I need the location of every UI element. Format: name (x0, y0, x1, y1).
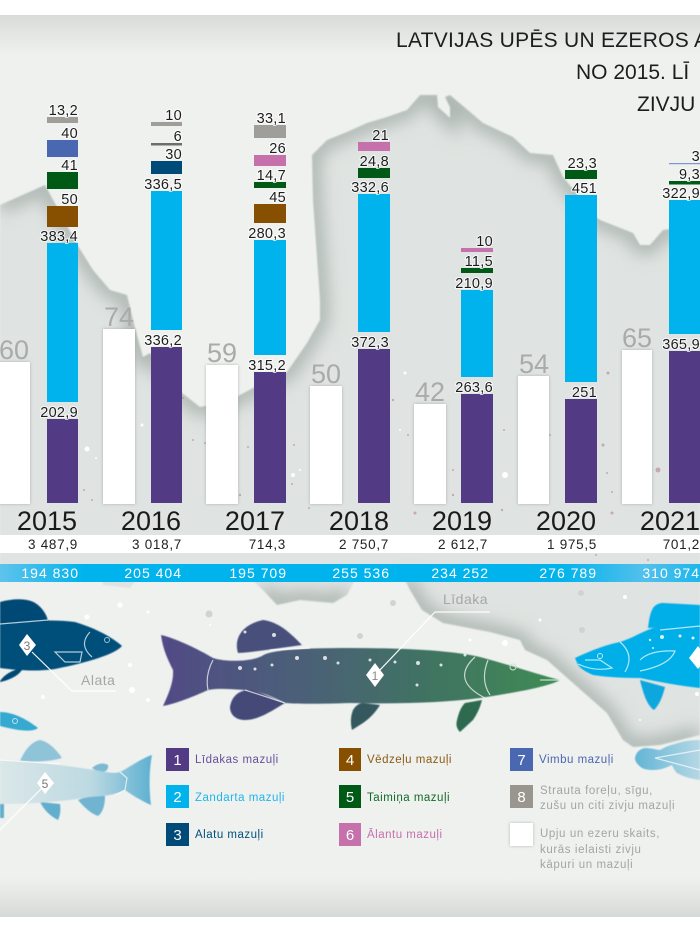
legend item 4: Vēdzeļu mazuļi (367, 754, 452, 766)
legend item 2: 2 (173, 789, 182, 806)
year labels: 2018 (329, 506, 389, 536)
legend item 5 (339, 785, 450, 808)
legend item 3 (166, 823, 264, 846)
chart: 2017: 33,1 (257, 111, 286, 127)
legend item 4: 4 (346, 752, 354, 769)
title: LATVIJAS UPĒS UN EZEROS A (396, 29, 700, 52)
chart: 2019: 11,5 (465, 254, 493, 270)
blue totals band (0, 564, 700, 582)
legend item white: Upju un ezeru skaits, (540, 828, 660, 840)
chart: 2015: 40 (61, 126, 78, 142)
legend item 6: 6 (346, 827, 354, 844)
year labels: 2017 (225, 506, 285, 536)
fish: alata: Alata (81, 672, 115, 688)
chart: 2017: 14,7 (257, 168, 286, 184)
fish: foreļu: 5 (42, 777, 49, 791)
fish: small cyan fish (0, 712, 38, 731)
legend item 1: 1 (173, 752, 182, 769)
chart: 2017: 59 (207, 338, 237, 368)
white totals band: 701,2 (663, 537, 700, 552)
chart: 2019: 263,6 (455, 380, 493, 396)
legend item 5: 5 (346, 789, 354, 806)
legend item 8: 8 (517, 789, 526, 806)
chart: 2017: 280,3 (248, 226, 286, 242)
legend item 6 (339, 823, 443, 846)
chart: 2016: 30 (165, 147, 182, 163)
fish: līdaka: Līdaka (443, 591, 488, 607)
year labels: 2020 (536, 506, 596, 536)
legend item 3: 3 (173, 827, 182, 844)
legend item 1: Līdakas mazuļi (195, 754, 279, 766)
year labels: 2019 (432, 506, 492, 536)
legend item 2: Zandarta mazuļi (195, 792, 285, 804)
map silhouette of Latvia (0, 90, 700, 760)
white totals band: 714,3 (249, 537, 286, 552)
blue totals band: 255 536 (332, 565, 390, 581)
fish: alata (0, 599, 122, 691)
chart: 2021 (622, 149, 700, 504)
chart: 2021: 3 (692, 149, 700, 165)
legend item 7: Vimbu mazuļi (539, 754, 614, 766)
white totals band: 2 750,7 (339, 537, 389, 552)
legend item white: kurās ielaisti zivju (540, 844, 641, 856)
chart: 2018 (310, 128, 390, 504)
chart: 2015 (0, 103, 78, 504)
chart: 2016: 6 (174, 129, 182, 145)
legend item 6: Ālantu mazuļi (367, 829, 443, 841)
legend item 4 (339, 748, 452, 771)
blue totals band: 310 974 (642, 565, 700, 581)
specks (41, 372, 699, 721)
chart: 2020: 251 (572, 385, 597, 401)
blue totals band: 276 789 (539, 565, 597, 581)
chart: 2015: 13,2 (49, 103, 78, 119)
fish: alata: 3 (24, 639, 31, 653)
chart: 2018: 21 (372, 128, 389, 144)
white totals band (0, 535, 700, 553)
year labels: 2021 (640, 506, 700, 536)
chart: 2016: 336,2 (144, 333, 182, 349)
legend item 5: Taimiņa mazuļi (367, 792, 450, 804)
chart: 2017: 45 (269, 190, 286, 206)
chart: 2015: 50 (61, 192, 78, 208)
chart: 2021: 65 (622, 323, 652, 353)
fish: zandarts (575, 603, 700, 710)
chart: 2015: 202,9 (40, 405, 78, 421)
title: NO 2015. LĪ (576, 61, 689, 84)
chart: 2018: 372,3 (351, 335, 389, 351)
white totals band: 3 018,7 (132, 537, 182, 552)
year labels: 2016 (121, 506, 181, 536)
chart: 2021: 322,9 (662, 186, 700, 202)
white totals band: 2 612,7 (438, 537, 488, 552)
white totals band: 3 487,9 (28, 537, 78, 552)
chart: 2016: 74 (104, 302, 134, 332)
blue totals band: 205 404 (124, 565, 182, 581)
fish: līdaka: 1 (372, 669, 379, 683)
year labels: 2015 (17, 506, 77, 536)
chart: 2018: 50 (311, 359, 341, 389)
chart: 2020: 451 (572, 181, 597, 197)
legend item 7 (510, 748, 614, 771)
chart: 2016 (103, 108, 182, 504)
chart: 2019: 42 (415, 377, 445, 407)
chart: 2017: 26 (269, 141, 286, 157)
chart: 2015: 41 (61, 158, 78, 174)
legend (166, 748, 675, 871)
chart: 2016: 10 (165, 108, 182, 124)
chart: 2020: 54 (519, 349, 549, 379)
legend item 2 (166, 785, 285, 808)
blue totals band: 194 830 (21, 565, 79, 581)
title (396, 29, 700, 116)
fish: foreļu (0, 740, 152, 830)
legend item white: kāpuri un mazuļi (540, 859, 633, 871)
fish: līdaka (161, 591, 560, 732)
legend item white (510, 823, 660, 871)
legend item 8: Strauta foreļu, sīgu, (540, 785, 653, 797)
chart: 2018: 24,8 (360, 154, 389, 170)
chart: 2019: 10 (476, 234, 493, 250)
chart: 2020 (518, 156, 597, 504)
chart: 2018: 332,6 (351, 180, 389, 196)
legend item 3: Alatu mazuļi (195, 829, 264, 841)
chart: 2017 (206, 111, 286, 504)
chart: 2019: 210,9 (455, 276, 493, 292)
legend item 7: 7 (517, 752, 526, 769)
chart: 2015: 383,4 (40, 229, 78, 245)
year labels (17, 506, 700, 536)
fish: lower right (635, 740, 700, 780)
chart: 2017: 315,2 (248, 358, 286, 374)
legend item 8: zušu un citi zivju mazuļi (540, 800, 675, 812)
chart: 2020: 23,3 (568, 156, 597, 172)
legend item 1 (166, 748, 279, 771)
chart: 2021: 365,9 (662, 337, 700, 353)
white totals band: 1 975,5 (547, 537, 597, 552)
chart: 2021: 9,3 (679, 167, 700, 183)
chart: 2016: 336,5 (144, 177, 182, 193)
blue totals band: 234 252 (431, 565, 489, 581)
legend item 8 (510, 785, 675, 812)
chart: 2019 (414, 234, 493, 504)
blue totals band: 195 709 (229, 565, 287, 581)
title: ZIVJU (637, 93, 695, 116)
